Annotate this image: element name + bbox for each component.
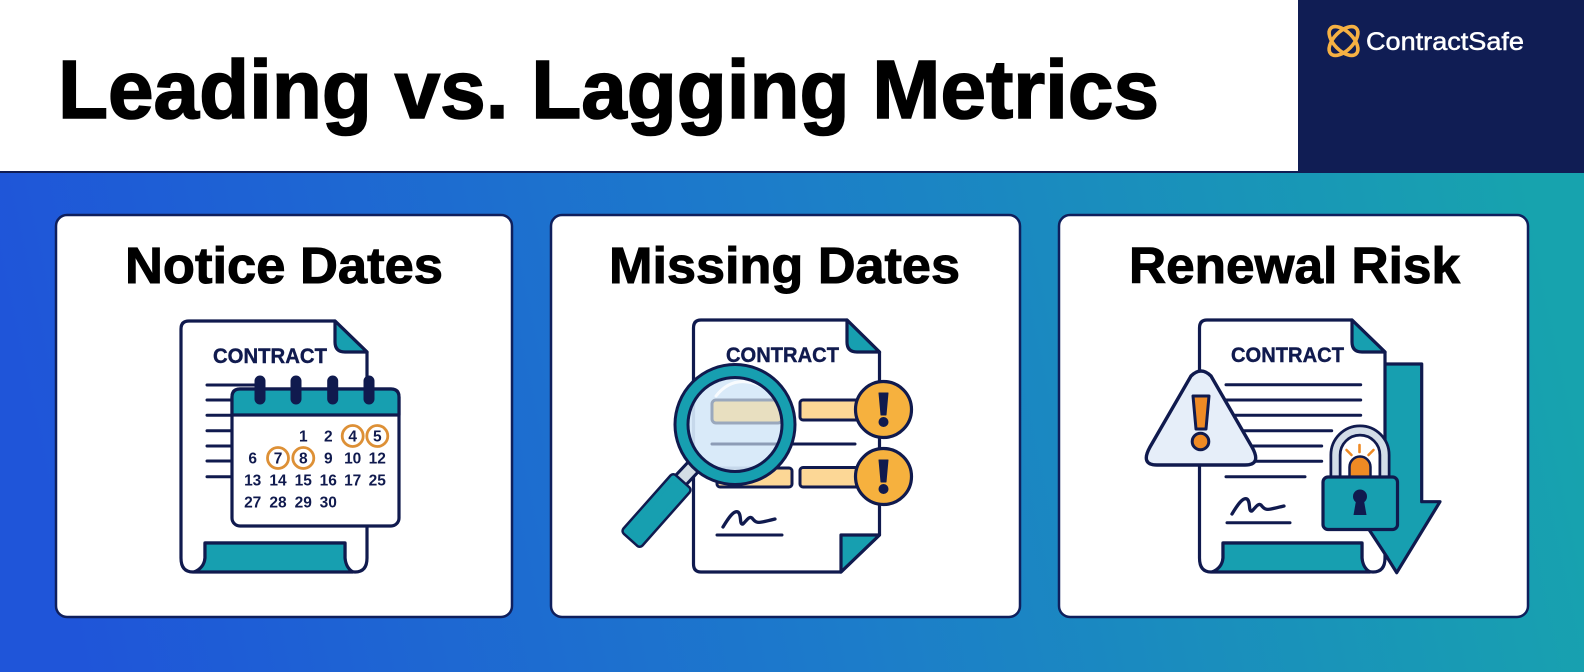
contract document: CONTRACT bbox=[1231, 344, 1344, 367]
calendar: 10 bbox=[344, 450, 361, 468]
calendar: 6 bbox=[248, 450, 257, 468]
calendar: 7 bbox=[274, 450, 282, 468]
contract document bbox=[181, 321, 367, 572]
calendar: 25 bbox=[369, 472, 386, 490]
header band bbox=[0, 0, 1298, 173]
icon: contract with magnifier and alerts bbox=[626, 320, 912, 572]
calendar: 1 bbox=[299, 428, 308, 446]
calendar: 16 bbox=[320, 472, 337, 490]
calendar: 8 bbox=[299, 450, 308, 468]
calendar: 28 bbox=[269, 494, 287, 512]
calendar: 14 bbox=[269, 472, 287, 490]
logo panel bbox=[1298, 0, 1584, 173]
padlock bbox=[1323, 430, 1398, 530]
heading: Renewal Risk: Renewal Risk bbox=[1129, 237, 1461, 294]
logo wordmark: ContractSafe bbox=[1366, 28, 1524, 56]
alert badge bbox=[856, 382, 912, 438]
calendar: 13 bbox=[244, 472, 262, 490]
contract document bbox=[694, 320, 880, 572]
panel: Notice Dates bbox=[56, 215, 512, 617]
background band bbox=[0, 172, 1584, 672]
heading: Missing Dates: Missing Dates bbox=[609, 237, 960, 294]
calendar bbox=[232, 381, 399, 526]
calendar: 9 bbox=[324, 450, 333, 468]
calendar: 30 bbox=[320, 494, 337, 512]
icon: ContractSafe logo mark bbox=[1324, 22, 1363, 60]
panel: Renewal Risk bbox=[1059, 215, 1528, 617]
title: Leading vs. Lagging Metrics bbox=[58, 43, 1159, 136]
arrow overlap bbox=[1366, 525, 1388, 558]
contract document: CONTRACT bbox=[726, 344, 839, 367]
calendar: 4 bbox=[348, 428, 357, 446]
panel: Missing Dates bbox=[551, 215, 1020, 617]
calendar: 27 bbox=[244, 494, 261, 512]
calendar: 2 bbox=[324, 428, 333, 446]
calendar: 12 bbox=[369, 450, 386, 468]
calendar: 15 bbox=[295, 472, 312, 490]
contract document bbox=[1200, 320, 1385, 572]
icon: contract with warning, lock and down arrow bbox=[1146, 320, 1440, 573]
warning triangle bbox=[1146, 371, 1256, 465]
calendar: 17 bbox=[344, 472, 361, 490]
calendar: 29 bbox=[295, 494, 312, 512]
down arrow bbox=[1365, 364, 1440, 573]
icon: contract document with calendar bbox=[181, 321, 399, 572]
heading: Notice Dates: Notice Dates bbox=[125, 237, 443, 294]
magnifying glass bbox=[626, 371, 788, 543]
contract document: CONTRACT bbox=[213, 345, 327, 368]
alert badge bbox=[856, 448, 912, 504]
calendar: 5 bbox=[373, 428, 382, 446]
